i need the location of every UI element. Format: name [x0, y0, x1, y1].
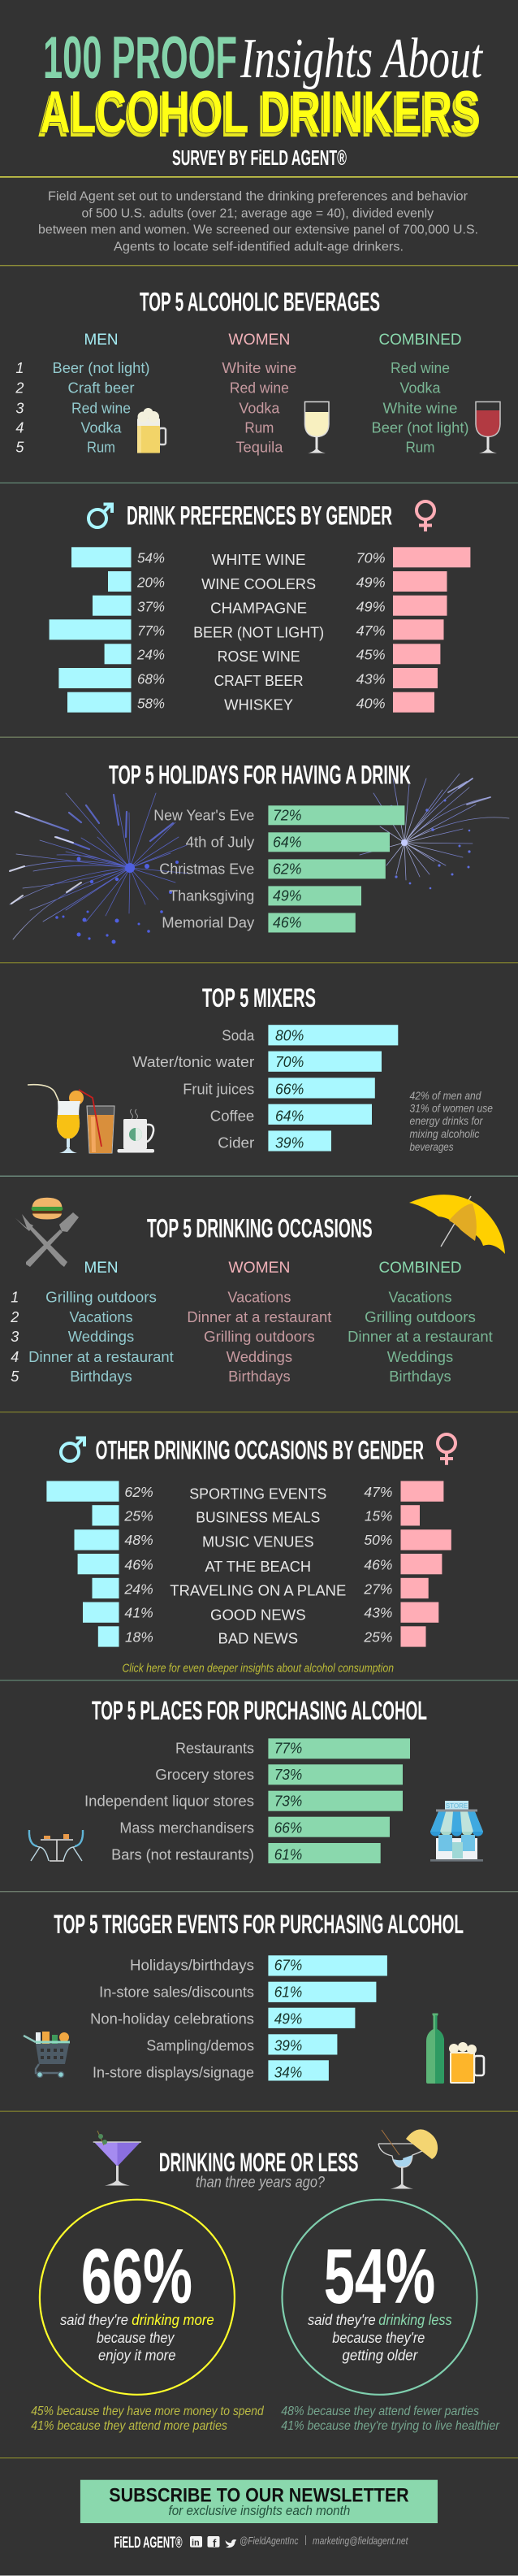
rank numbers: 4 — [11, 1349, 19, 1365]
list: combined — [372, 360, 469, 456]
social handle: @FieldAgentInc — [240, 2535, 299, 2547]
column headers: COMBINED — [378, 1260, 461, 1277]
holiday labels: Christmas Eve — [159, 861, 254, 878]
women percentages: 40% — [356, 696, 386, 712]
circle: drinking more: drinking more — [132, 2311, 214, 2328]
occasion labels: AT THE BEACH — [205, 1559, 311, 1575]
heading: TOP 5 MIXERS — [202, 983, 316, 1013]
men percentages — [123, 1484, 153, 1646]
icon: red wine glass — [476, 401, 500, 453]
rank numbers: 5 — [11, 1368, 19, 1385]
chart: places bars: 73% — [274, 1793, 302, 1810]
panel: drinking more or less — [31, 2129, 500, 2433]
icon: linkedin: in — [192, 2539, 200, 2548]
list: combined: Vodka — [399, 379, 441, 396]
list: men — [52, 360, 149, 456]
list: women: Rum — [244, 420, 274, 436]
icon: female symbol — [417, 501, 434, 531]
intro text: Agents to locate self-identified adult-age drinkers. — [114, 241, 404, 254]
panel: other drinking occasions by gender — [46, 1434, 455, 1676]
column headers: WOMEN — [228, 332, 290, 349]
circle: drinking more: 66% — [81, 2233, 192, 2320]
icon: cafe table and chairs — [29, 1830, 83, 1861]
circle: drinking more: because they — [97, 2329, 175, 2346]
women percentages: 45% — [356, 647, 386, 663]
icon: cocktail — [28, 1085, 84, 1153]
reasons: drinking more: 41% because they attend more parties — [31, 2419, 227, 2433]
list: women — [222, 360, 296, 456]
icon: store: STORE — [446, 1802, 468, 1810]
icon: coffee mug — [117, 1109, 154, 1152]
list: women: Red wine — [230, 379, 289, 396]
chart: places bars: 66% — [274, 1820, 302, 1837]
list: women: Vodka — [239, 400, 280, 416]
women percentages: 25% — [363, 1629, 392, 1646]
chart: mixer bars: 66% — [275, 1081, 304, 1097]
list: combined: Beer (not light) — [372, 420, 469, 436]
chart: trigger bars: 49% — [274, 2011, 302, 2027]
women percentages: 47% — [356, 622, 386, 639]
callout: energy drinks note — [409, 1089, 493, 1153]
chart: mixer bars — [268, 1025, 398, 1151]
drink labels — [193, 552, 324, 713]
list: men: Birthdays — [70, 1368, 132, 1385]
chart: trigger bars — [268, 1955, 387, 2081]
men percentages: 20% — [136, 575, 165, 591]
women percentages — [363, 1484, 392, 1646]
women percentages: 50% — [364, 1532, 392, 1548]
chart: places bars: 61% — [274, 1846, 302, 1863]
women percentages: 49% — [356, 598, 386, 614]
callout: energy drinks note: mixing alcoholic — [409, 1127, 479, 1140]
rank numbers: 3 — [15, 400, 24, 416]
chart: mixer bars: 64% — [275, 1108, 304, 1124]
men percentages: 58% — [137, 696, 165, 712]
trigger labels: Non-holiday celebrations — [90, 2011, 254, 2027]
firework right core and sparks — [390, 800, 471, 889]
heading: DRINKING MORE OR LESS — [159, 2148, 359, 2177]
list: women: Weddings — [227, 1349, 292, 1365]
circle: drinking more — [40, 2200, 235, 2395]
list: combined: Birthdays — [389, 1368, 451, 1385]
women bars — [401, 1481, 451, 1647]
email: marketing@fieldagent.net — [313, 2535, 408, 2547]
icon: green bottle — [426, 2014, 444, 2084]
trigger labels: Sampling/demos — [146, 2037, 254, 2053]
panel: top 5 alcoholic beverages — [15, 288, 500, 456]
intro text: between men and women. We screened our extensive panel of 700,000 U.S. — [38, 223, 478, 237]
icon: beer mug — [449, 2042, 484, 2084]
footer — [114, 2535, 408, 2552]
mixer labels — [132, 1027, 255, 1151]
icon: female symbol — [438, 1434, 455, 1465]
list: combined: Grilling outdoors — [365, 1309, 476, 1325]
subheading: than three years ago? — [196, 2175, 325, 2192]
icon: male symbol — [61, 1438, 84, 1461]
intro text: of 500 U.S. adults (over 21; average age = 40), divided evenly — [81, 207, 434, 221]
intro text — [38, 190, 478, 254]
men percentages: 24% — [136, 647, 165, 663]
icon: twitter — [226, 2539, 236, 2548]
list: women: Tequila — [235, 440, 283, 456]
list: men: Red wine — [71, 400, 131, 416]
intro text: Field Agent set out to understand the drinking preferences and behavior — [48, 190, 468, 204]
rank numbers: 2 — [15, 379, 24, 396]
panel: top 5 places for purchasing alcohol — [29, 1696, 483, 1863]
chart: trigger bars: 61% — [274, 1984, 302, 2001]
men percentages: 46% — [124, 1556, 153, 1572]
men percentages: 77% — [137, 622, 165, 639]
chart: holiday bars: 72% — [273, 808, 302, 824]
rank numbers: 1 — [15, 360, 24, 376]
icon: shopping cart — [24, 2032, 70, 2077]
firework left core and sparks — [55, 856, 179, 944]
drink labels: CHAMPAGNE — [210, 601, 307, 617]
list: men: Grilling outdoors — [45, 1290, 157, 1306]
list: combined: White wine — [383, 400, 458, 416]
callout: energy drinks note: energy drinks for — [409, 1114, 484, 1127]
list: women: Dinner at a restaurant — [187, 1309, 331, 1325]
circle: drinking less: because they're — [332, 2329, 425, 2346]
men percentages: 54% — [137, 550, 165, 566]
place labels — [84, 1740, 254, 1863]
column headers: MEN — [84, 1260, 119, 1277]
list: women: Grilling outdoors — [204, 1329, 315, 1345]
list: men — [28, 1290, 174, 1385]
icon: linkedin — [190, 2536, 202, 2548]
header — [37, 25, 483, 170]
occasion labels: TRAVELING ON A PLANE — [170, 1583, 346, 1599]
list: women — [187, 1290, 331, 1385]
rank numbers: 4 — [15, 420, 24, 436]
list: men: Vodka — [81, 420, 122, 436]
chart: holiday bars: 64% — [273, 835, 302, 851]
chart: mixer bars: 80% — [275, 1027, 304, 1043]
circle: drinking less: said they're — [308, 2311, 376, 2328]
column headers: COMBINED — [378, 332, 461, 349]
field agent logo: FiELD AGENT® — [114, 2535, 183, 2552]
rank numbers: 5 — [15, 440, 24, 456]
list: men: Dinner at a restaurant — [28, 1349, 174, 1365]
chart: holiday bars: 49% — [273, 888, 302, 904]
list: men: Weddings — [68, 1329, 134, 1345]
men percentages: 24% — [123, 1581, 153, 1598]
reasons: drinking less — [281, 2405, 500, 2433]
drink labels: WHITE WINE — [212, 552, 306, 568]
place labels: Restaurants — [175, 1740, 254, 1756]
panel: top 5 trigger events — [24, 1910, 484, 2084]
occasion labels: GOOD NEWS — [210, 1607, 306, 1624]
callout: energy drinks note: 31% of women use — [409, 1101, 493, 1114]
trigger labels: In-store displays/signage — [93, 2065, 254, 2081]
women percentages: 43% — [356, 671, 386, 687]
mixer labels: Water/tonic water — [132, 1054, 254, 1070]
holiday labels: New Year's Eve — [153, 808, 254, 824]
link text: Click here for even deeper insights about alcohol consumption — [122, 1663, 394, 1676]
occasion labels: MUSIC VENUES — [202, 1534, 314, 1550]
chart: trigger bars: 67% — [274, 1957, 302, 1973]
circle: drinking less: 54% — [324, 2233, 435, 2320]
icon: facebook: f — [213, 2537, 217, 2549]
panel: top 5 holidays — [10, 761, 509, 944]
place labels: Independent liquor stores — [84, 1793, 254, 1810]
newsletter box: for exclusive insights each month — [169, 2503, 350, 2518]
icon: beach umbrella — [409, 1195, 505, 1254]
panel: top 5 drinking occasions — [10, 1195, 505, 1385]
chart: trigger bars: 34% — [274, 2065, 302, 2081]
holiday labels: 4th of July — [186, 835, 254, 851]
list: men: Craft beer — [68, 379, 135, 396]
list: men: Rum — [87, 440, 115, 456]
chart: places bars — [268, 1738, 410, 1863]
title: 100 proof: 100 PROOF — [43, 25, 237, 91]
reasons: drinking less: 48% because they attend fewer parties — [281, 2405, 479, 2418]
list: combined: Red wine — [391, 360, 450, 376]
holiday labels: Memorial Day — [162, 915, 254, 931]
women bars — [393, 547, 470, 713]
rank numbers — [15, 360, 24, 456]
callout: energy drinks note: 42% of men and — [409, 1089, 482, 1102]
reasons: drinking more — [31, 2405, 265, 2433]
circle: drinking less: getting older — [343, 2347, 418, 2363]
men percentages: 48% — [124, 1532, 153, 1548]
women percentages: 70% — [356, 550, 386, 566]
mixer labels: Cider — [218, 1134, 254, 1151]
rank numbers — [10, 1290, 19, 1385]
rank numbers: 2 — [10, 1309, 19, 1325]
chart: mixer bars: 70% — [275, 1054, 304, 1070]
drink labels: ROSE WINE — [218, 648, 300, 665]
heading: TOP 5 DRINKING OCCASIONS — [147, 1213, 373, 1242]
icon: male symbol — [88, 504, 112, 527]
list: combined: Dinner at a restaurant — [347, 1329, 493, 1345]
fireworks left — [10, 793, 191, 939]
circle: drinking less: drinking less — [378, 2311, 452, 2328]
men bars — [46, 1481, 119, 1647]
place labels: Grocery stores — [155, 1767, 254, 1783]
men percentages: 68% — [137, 671, 165, 687]
chart: holiday bars — [268, 805, 404, 933]
circle: drinking more: said they're — [60, 2311, 128, 2328]
icon: white wine glass — [305, 401, 329, 453]
women percentages: 47% — [364, 1484, 392, 1500]
men percentages: 62% — [124, 1484, 153, 1500]
rank numbers: 3 — [11, 1329, 19, 1345]
icon: juice glass — [79, 1090, 114, 1153]
mixer labels: Fruit juices — [183, 1081, 254, 1097]
icon: facebook — [208, 2536, 219, 2549]
icon: burger — [32, 1198, 63, 1219]
mixer labels: Coffee — [210, 1108, 254, 1124]
icon: beer mug — [137, 408, 166, 453]
men percentages — [136, 550, 165, 712]
place labels: Bars (not restaurants) — [111, 1846, 254, 1863]
list: women: White wine — [222, 360, 296, 376]
panel: top 5 mixers — [28, 983, 493, 1153]
list: women: Vacations — [227, 1290, 291, 1306]
icon: crossed fork and spatula — [15, 1212, 79, 1267]
holiday labels — [153, 808, 254, 931]
list: combined: Weddings — [387, 1349, 453, 1365]
occasion labels — [170, 1486, 346, 1647]
circle: drinking less — [283, 2200, 477, 2395]
column headers: WOMEN — [228, 1260, 290, 1277]
column headers — [84, 1260, 461, 1277]
chart: places bars: 77% — [274, 1740, 302, 1756]
men percentages: 37% — [137, 598, 165, 614]
women percentages: 27% — [363, 1581, 392, 1598]
occasion labels: SPORTING EVENTS — [189, 1486, 326, 1503]
callout: energy drinks note: beverages — [409, 1140, 453, 1153]
drink labels: WHISKEY — [224, 697, 293, 713]
newsletter box: SUBSCRIBE TO OUR NEWSLETTER — [109, 2484, 409, 2506]
occasion labels: BAD NEWS — [218, 1631, 298, 1647]
icon: margarita — [378, 2129, 438, 2189]
women percentages: 46% — [364, 1556, 392, 1572]
women percentages: 49% — [356, 575, 386, 591]
survey by line: SURVEY BY FiELD AGENT® — [172, 145, 347, 170]
men percentages: 41% — [124, 1604, 153, 1620]
circle: drinking more: enjoy it more — [98, 2347, 175, 2363]
chart: places bars: 73% — [274, 1767, 302, 1783]
list: combined: Rum — [406, 440, 435, 456]
drink labels: WINE COOLERS — [201, 576, 316, 592]
column headers — [84, 332, 461, 349]
drink labels: CRAFT BEER — [214, 673, 304, 689]
women percentages: 15% — [365, 1508, 392, 1524]
rank numbers: 1 — [11, 1290, 19, 1306]
trigger labels — [90, 1957, 254, 2081]
men percentages: 18% — [125, 1629, 153, 1646]
mixer labels: Soda — [222, 1027, 255, 1043]
newsletter box — [80, 2480, 438, 2523]
women percentages — [356, 550, 386, 712]
holiday labels: Thanksgiving — [169, 888, 254, 904]
men bars — [50, 547, 132, 713]
occasion labels: BUSINESS MEALS — [196, 1510, 320, 1526]
icon: store — [430, 1801, 483, 1862]
fireworks right — [360, 774, 509, 880]
drink labels: BEER (NOT LIGHT) — [193, 625, 324, 641]
chart: holiday bars: 62% — [273, 861, 302, 878]
list: combined: Vacations — [388, 1290, 451, 1306]
chart: holiday bars: 46% — [273, 915, 302, 931]
trigger labels: Holidays/birthdays — [130, 1957, 254, 1973]
women percentages: 43% — [364, 1604, 392, 1620]
chart: mixer bars: 39% — [275, 1134, 304, 1151]
icon: martini — [93, 2131, 141, 2186]
chart: trigger bars: 39% — [274, 2037, 302, 2053]
trigger labels: In-store sales/discounts — [99, 1984, 254, 2001]
list: men: Beer (not light) — [52, 360, 149, 376]
panel: drink preferences by gender — [50, 501, 470, 713]
men percentages: 25% — [123, 1508, 153, 1524]
reasons: drinking more: 45% because they have more money to spend — [31, 2405, 265, 2418]
place labels: Mass merchandisers — [119, 1820, 254, 1837]
list: women: Birthdays — [228, 1368, 291, 1385]
list: men: Vacations — [70, 1309, 133, 1325]
column headers: MEN — [84, 332, 119, 349]
list: combined — [347, 1290, 493, 1385]
